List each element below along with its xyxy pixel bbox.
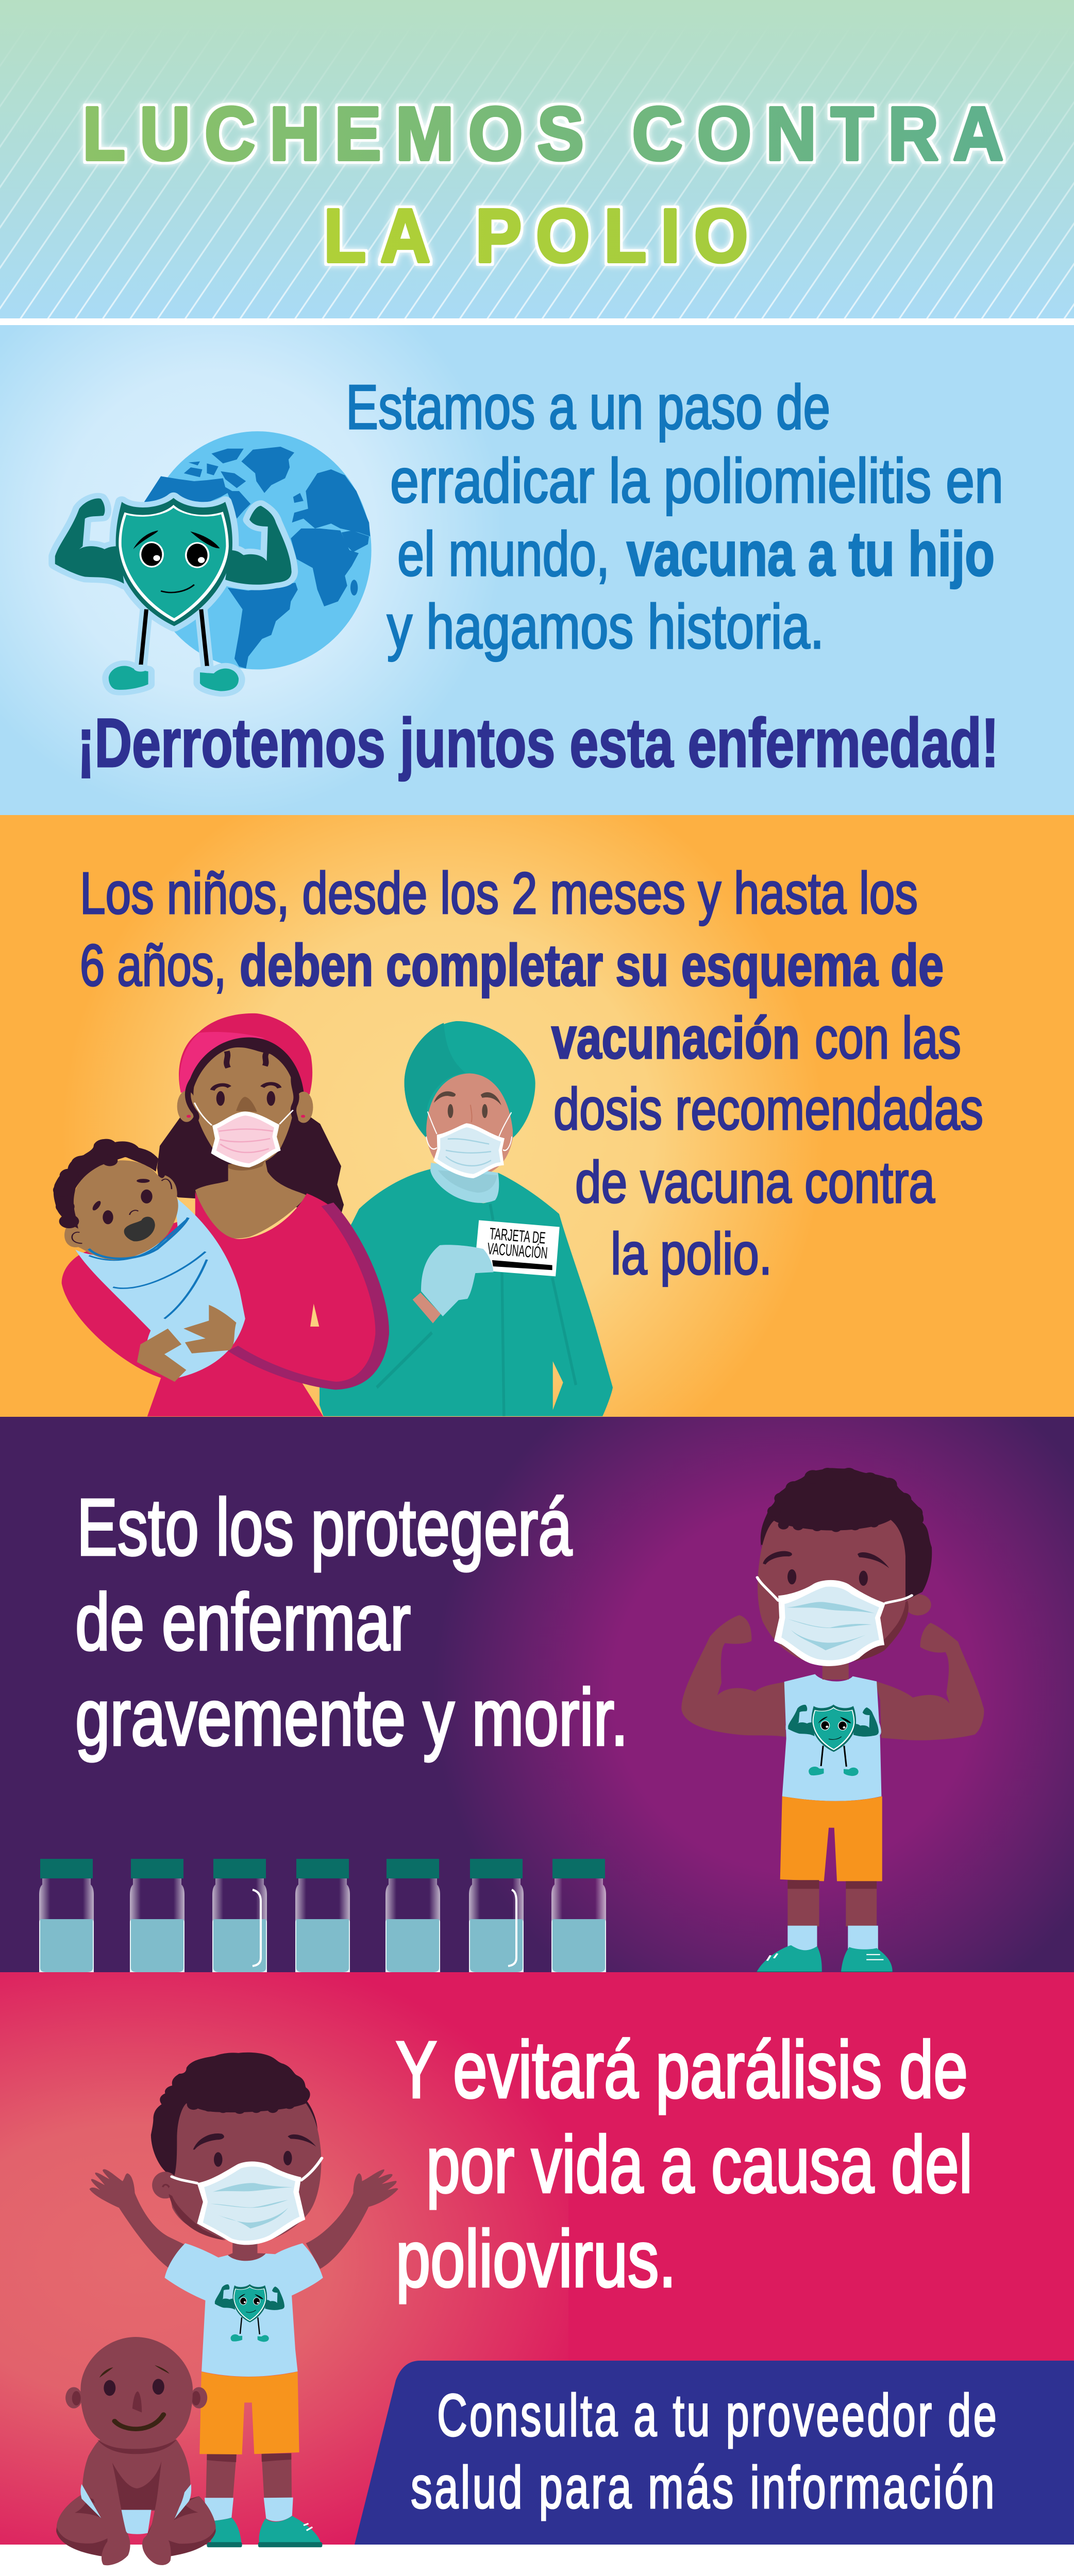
panel: world intro	[0, 325, 1074, 815]
text block: schedule	[80, 861, 983, 1287]
illustration: boy head and shirt	[151, 2053, 323, 2377]
text block: protection: de enfermar	[75, 1578, 411, 1667]
title: LA POLIO	[324, 194, 762, 278]
text block: schedule: de vacuna contra	[575, 1150, 935, 1215]
illustration: baby head	[53, 1139, 188, 1260]
text block: intro: y hagamos historia.	[387, 591, 824, 662]
illustration: boy flexing arms	[681, 1615, 984, 1740]
text block: intro: Estamos a un paso de	[346, 372, 830, 442]
text block: protection: Esto los protegerá	[77, 1483, 572, 1572]
illustration: boy head with mask	[757, 1468, 932, 1680]
panel: consult box	[355, 2361, 1074, 2545]
text: vaccination card: VACUNACIÓN	[486, 1239, 548, 1262]
text block: paralysis: poliovirus.	[396, 2214, 676, 2304]
text: consult provider	[411, 2382, 999, 2521]
text block: protection: gravemente y morir.	[75, 1673, 628, 1762]
panel: paralysis	[0, 1972, 1074, 2565]
icon: mascot on t-shirt	[215, 2284, 284, 2342]
text block: protection	[75, 1483, 628, 1762]
text block: schedule: vacunación	[551, 1006, 800, 1071]
icon: shield mascot	[55, 498, 292, 691]
text block: schedule: 6 años,	[80, 933, 226, 998]
title: LUCHEMOS CONTRA	[82, 92, 1018, 176]
text: vaccination card: TARJETA DE	[489, 1224, 546, 1247]
icon: nurse glove	[413, 1245, 494, 1324]
text block: intro: el mundo,	[397, 519, 610, 589]
panel: vaccination schedule	[0, 815, 1074, 1417]
illustration: mother hair and head	[157, 1013, 344, 1239]
illustration: nurse	[320, 1021, 613, 1416]
illustration: boy arms up	[89, 2170, 398, 2269]
text block: schedule: con las	[815, 1006, 961, 1071]
panel: header	[0, 0, 1074, 318]
text: vaccination card	[486, 1224, 548, 1262]
text block: schedule: la polio.	[611, 1222, 772, 1287]
illustration: mother dress	[62, 1192, 389, 1416]
title	[82, 92, 1018, 278]
icon: mascot on shirt	[788, 1705, 879, 1776]
text block: intro	[346, 372, 1003, 662]
illustration: boy legs and shorts	[199, 2371, 322, 2547]
panel: protection	[0, 1417, 1074, 1977]
icon: vials row	[39, 1859, 606, 1975]
illustration: baby	[56, 2337, 216, 2565]
illustration: boy flexing body	[757, 1674, 893, 1977]
icon: globe	[144, 431, 372, 669]
text block: paralysis	[396, 2025, 972, 2304]
